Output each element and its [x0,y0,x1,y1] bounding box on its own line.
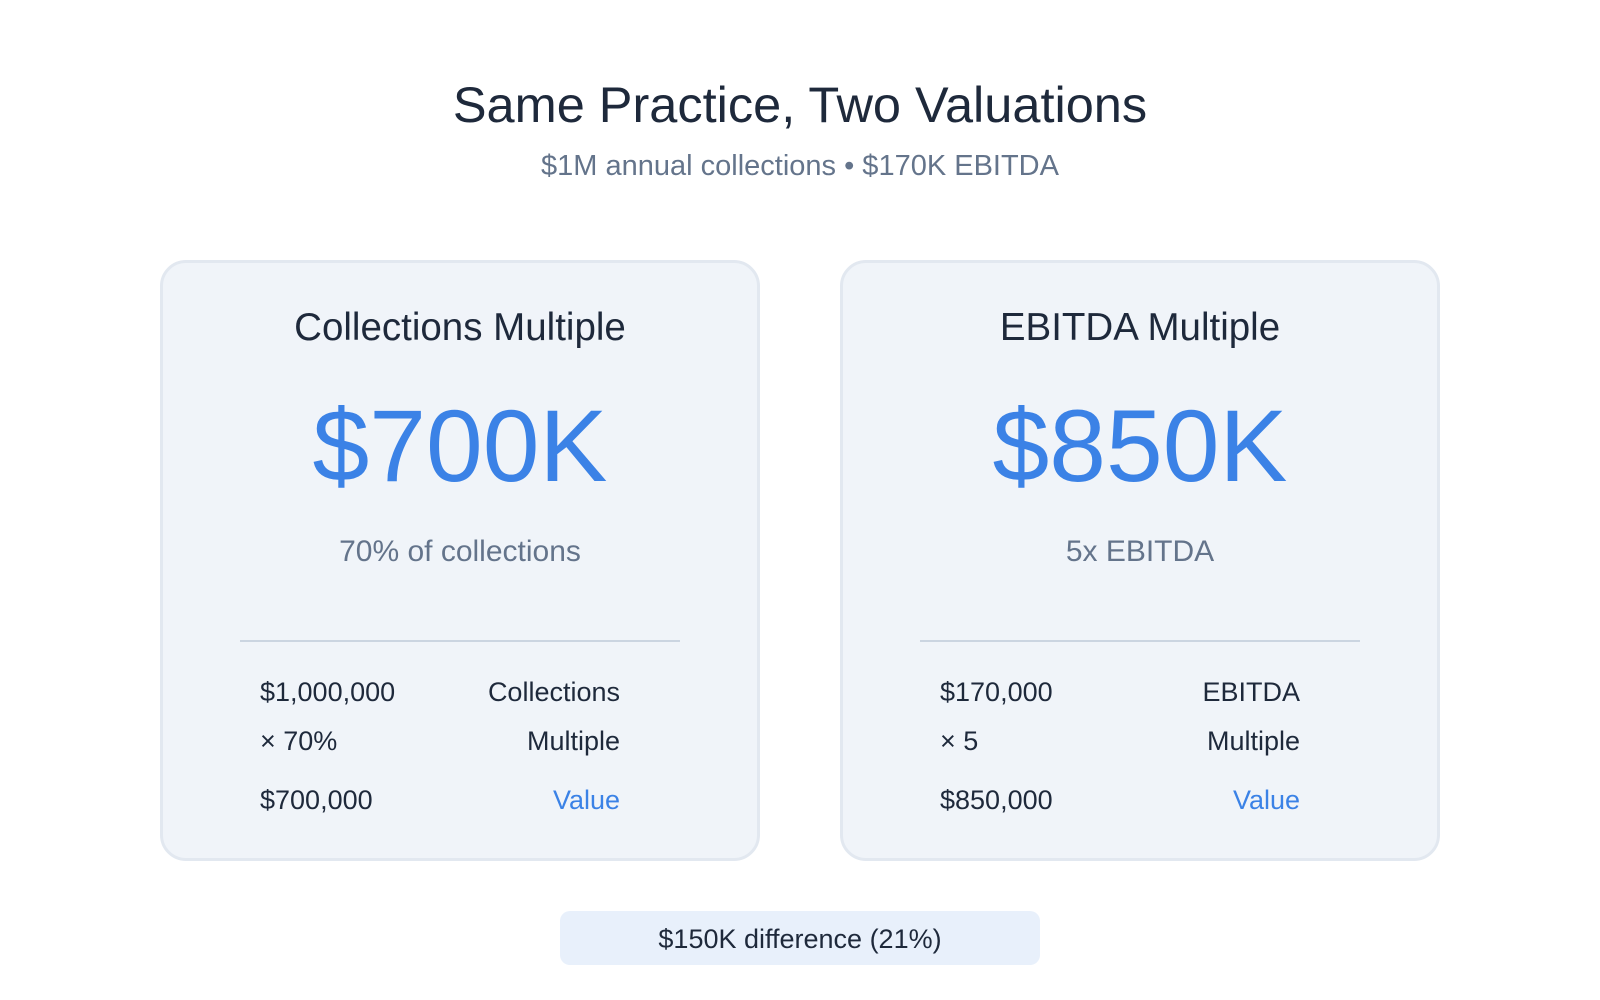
subtext: 70% of collections [339,535,581,568]
subtext: 5x EBITDA [1066,535,1214,568]
row: collections: $1,000,000 [260,677,395,707]
row: value: Value [1233,785,1300,815]
row: value: Value [553,785,620,815]
card heading: EBITDA Multiple [1000,306,1280,349]
row: value [260,785,620,815]
row: multiple: Multiple [1207,726,1300,756]
row: EBITDA [940,677,1300,707]
row: multiple [260,726,620,756]
title: Same Practice, Two Valuations [453,76,1147,133]
row: collections: Collections [488,677,620,707]
row: EBITDA: EBITDA [1202,677,1300,707]
card heading: Collections Multiple [294,306,626,349]
big value: $850K [993,389,1287,503]
subtitle: $1M annual collections • $170K EBITDA [541,150,1059,182]
panel: collections multiple [160,260,760,861]
row: multiple [940,726,1300,756]
big value: $700K [313,389,607,503]
row: multiple: Multiple [527,726,620,756]
row: value: $700,000 [260,785,373,815]
row: value [940,785,1300,815]
row: value: $850,000 [940,785,1053,815]
row: multiple: × 70% [260,726,337,756]
row: multiple: × 5 [940,726,978,756]
callout: difference [560,911,1040,965]
callout: difference: $150K difference (21%) [658,924,942,954]
panel: EBITDA multiple [840,260,1440,861]
row: EBITDA: $170,000 [940,677,1053,707]
row: collections [260,677,620,707]
